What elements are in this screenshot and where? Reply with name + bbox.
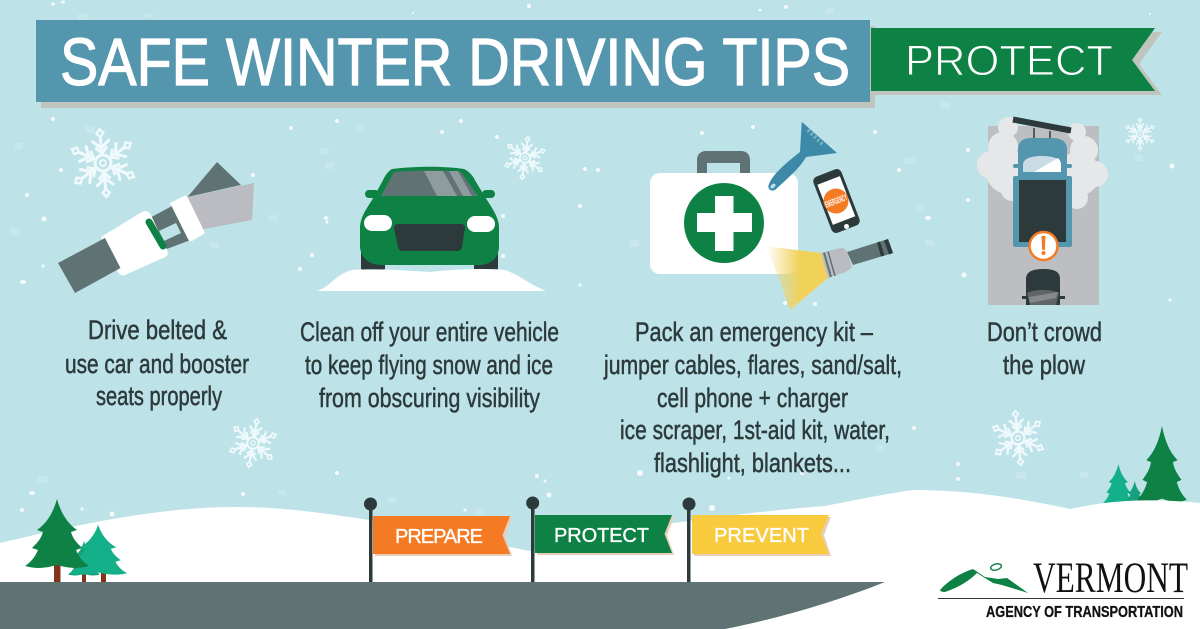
text: tip 4: [987, 317, 1102, 380]
snowflake 1: [66, 126, 140, 200]
text: tip 3: Pack an emergency kit –: [635, 317, 873, 347]
icon: green mountain: [940, 563, 1028, 593]
text: tip 2: [300, 317, 559, 413]
warning sign: [1030, 232, 1058, 260]
text: tip 4: the plow: [1003, 350, 1085, 380]
falling snow: [20, 0, 1174, 516]
text: tip 2: from obscuring visibility: [319, 383, 540, 413]
title banner: SAFE WINTER DRIVING TIPS: [60, 25, 850, 100]
text: tip 3: [603, 317, 902, 478]
right trees: [1103, 426, 1187, 509]
flag: prevent: [682, 498, 831, 582]
text: tip 3: cell phone + charger: [657, 383, 848, 413]
icon: first aid kit: [650, 151, 798, 274]
text: tip 1: seats properly: [96, 381, 222, 411]
snowflake 2: [501, 134, 549, 182]
flag: prevent: PREVENT: [714, 525, 809, 547]
text: tip 4: Don’t crowd: [987, 317, 1102, 347]
text: tip 2: to keep flying snow and ice: [305, 350, 553, 380]
text: tip 2: Clean off your entire vehicle: [300, 317, 559, 347]
snow hills: [0, 490, 1200, 629]
left trees: [25, 499, 127, 582]
logo: Vermont Agency of Transportation: [938, 555, 1188, 621]
snowflake 5: [988, 408, 1048, 468]
icon: phone: EMERGENCY: [823, 192, 849, 210]
flag: protect: PROTECT: [554, 525, 649, 547]
plowed snow clouds: [977, 117, 1108, 209]
text: tip 3: flashlight, blankets...: [654, 448, 851, 478]
icon: green car in snow: [316, 167, 546, 291]
snowflake 4: [1124, 118, 1156, 150]
flag: prepare: [364, 498, 512, 582]
snowflake 3: [225, 415, 281, 471]
icon: snow plow scene: [977, 117, 1108, 305]
text: tip 3: ice scraper, 1st-aid kit, water,: [620, 415, 890, 445]
text: tip 1: use car and booster: [65, 349, 249, 379]
text: tip 1: [65, 315, 249, 411]
icon: phone: [812, 168, 861, 234]
icon: ice scraper: [768, 122, 837, 191]
road: [0, 582, 885, 629]
text: tip 3: jumper cables, flares, sand/salt,: [603, 350, 902, 380]
flag: protect: [526, 496, 674, 582]
protect ribbon: PROTECT: [905, 37, 1113, 85]
soft snow patches: [10, 8, 1143, 515]
following car: [1022, 269, 1065, 305]
protect ribbon: [871, 28, 1162, 95]
flag: prepare: PREPARE: [395, 526, 483, 548]
text: tip 1: Drive belted &: [88, 315, 227, 345]
icon: flashlight: [765, 239, 893, 310]
icon: seat belt: [58, 162, 254, 293]
